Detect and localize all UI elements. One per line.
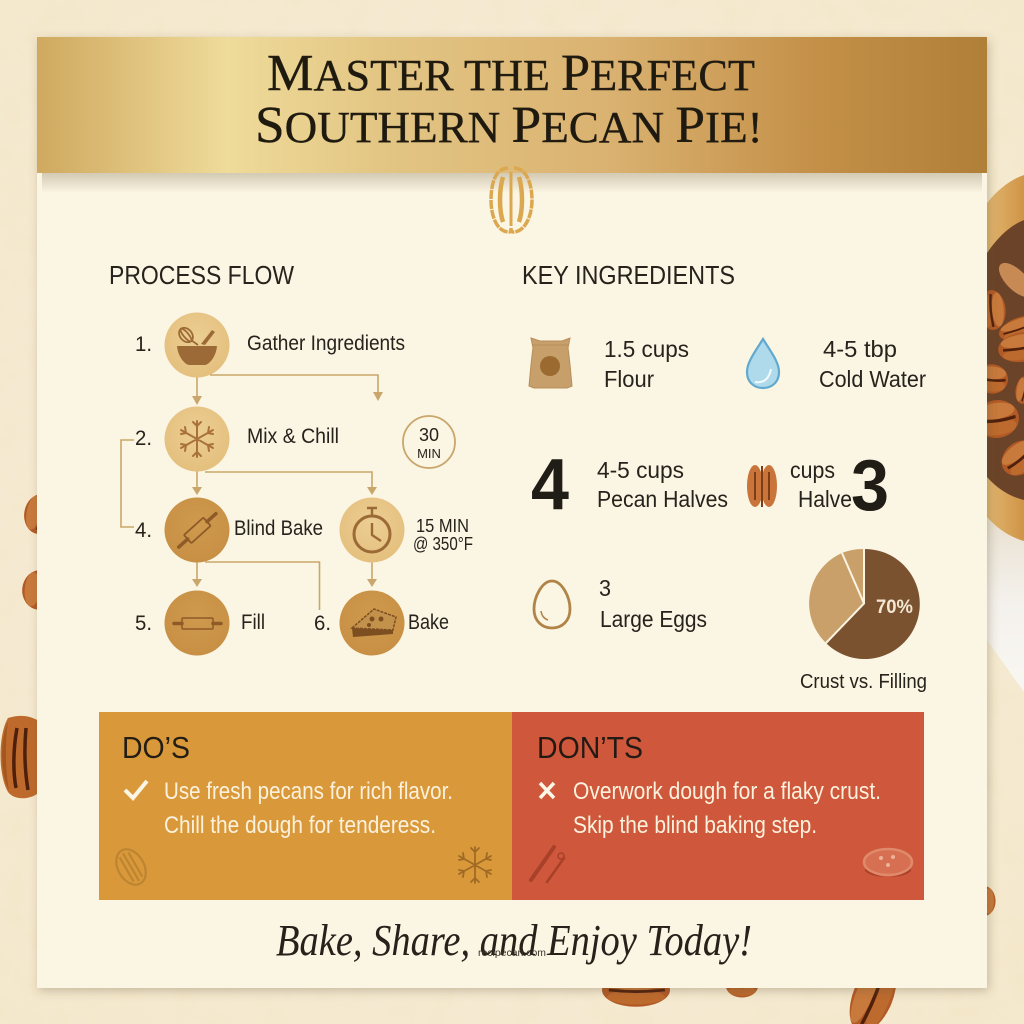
pie chart: crust vs filling: 70%: [876, 597, 913, 618]
ingredient: pecan halves: cups: [790, 457, 835, 483]
heading: process flow: PROCESS FLOW: [109, 260, 294, 290]
ingredient: cold water: Cold Water: [819, 366, 926, 392]
step 3: timer 15 min: @ 350°F: [413, 534, 473, 554]
ingredient: flour: Flour: [604, 366, 654, 392]
ingredient: pecan halves: Halve: [798, 486, 852, 512]
panel: do's: Use fresh pecans for rich flavor.: [164, 778, 453, 805]
flow connectors: [121, 375, 383, 610]
panel: do's: DO’S: [122, 730, 190, 765]
timer badge: 30 min: MIN: [417, 446, 441, 461]
ingredient: cold water: 4-5 tbp: [823, 336, 897, 362]
step 6: bake: [314, 590, 449, 656]
ingredient: pecan halves: 4: [531, 445, 569, 525]
ingredient: eggs: 3: [599, 575, 611, 601]
icon: faded pie: [864, 849, 912, 877]
pie chart: crust vs filling: Crust vs. Filling: [800, 671, 927, 693]
ingredient: flour: [529, 336, 689, 392]
step 6: bake: Bake: [408, 611, 449, 634]
watermark: recipecan.com: [478, 947, 546, 959]
step 1: gather ingredients: [135, 312, 405, 378]
heading: key ingredients: KEY INGREDIENTS: [522, 260, 735, 290]
title: MASTER THE PERFECT: [267, 45, 755, 102]
step 5: fill: [135, 590, 265, 656]
ingredient: flour: 1.5 cups: [604, 336, 689, 362]
panel: don'ts: DON’TS: [537, 730, 643, 765]
ingredient: pecan halves: [531, 445, 889, 526]
step 4: blind bake: 4.: [135, 519, 152, 542]
decoration: pecan pie photo: [973, 175, 1024, 692]
step 1: gather ingredients: 1.: [135, 333, 152, 356]
ingredient: pecan halves: 4-5 cups: [597, 457, 684, 483]
icon: faded snowflake: [459, 847, 491, 883]
step 2: mix and chill: Mix & Chill: [247, 425, 339, 448]
panel: don'ts: Skip the blind baking step.: [573, 812, 817, 839]
step 5: fill: 5.: [135, 612, 152, 635]
step 6: bake: 6.: [314, 612, 331, 635]
panel: don'ts: Overwork dough for a flaky crust.: [573, 778, 881, 805]
icon: faded rolling pin: [531, 847, 564, 882]
panel: do's: Chill the dough for tenderess.: [164, 812, 436, 839]
decoration: pecans bottom: [602, 886, 996, 1024]
ingredient: eggs: [534, 575, 707, 632]
icon: check: [125, 781, 147, 798]
ingredient: cold water: [747, 336, 926, 392]
pie chart: crust vs filling: [800, 549, 927, 693]
icon: faded pecan: [110, 844, 152, 890]
icon: cross: [540, 783, 554, 798]
header banner: [37, 37, 987, 173]
icon: pecan ornament: [491, 168, 532, 232]
icon: pecan: [747, 465, 777, 507]
closing line: Bake, Share, and Enjoy Today!: [276, 916, 752, 965]
step 4: blind bake: Blind Bake: [234, 517, 323, 540]
timer badge: 30 min: [403, 416, 455, 468]
step 1: gather ingredients: Gather Ingredients: [247, 332, 405, 355]
timer badge: 30 min: 30: [419, 425, 439, 445]
title: [255, 45, 763, 154]
step 3: timer 15 min: 15 MIN: [416, 516, 469, 536]
panel: do's: [99, 712, 512, 900]
header shadow: [42, 173, 982, 193]
step 3: timer 15 min: [340, 498, 473, 562]
panel: don'ts: [512, 712, 924, 900]
decoration: pecans left: [0, 492, 60, 798]
ingredient: pecan halves: Pecan Halves: [597, 486, 728, 512]
step 4: blind bake: [135, 498, 323, 562]
step 2: mix and chill: 2.: [135, 427, 152, 450]
step 5: fill: Fill: [241, 611, 265, 634]
ingredient: pecan halves: 3: [851, 446, 889, 526]
ingredient: eggs: Large Eggs: [600, 606, 707, 632]
title: SOUTHERN PECAN PIE!: [255, 97, 763, 154]
step 2: mix and chill: [135, 406, 339, 472]
